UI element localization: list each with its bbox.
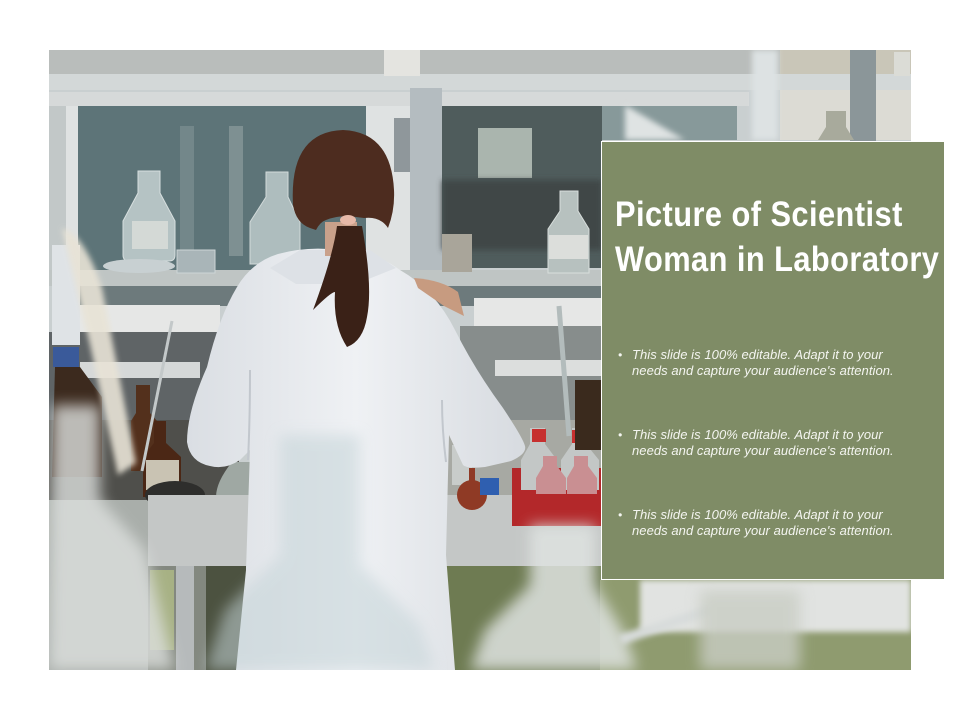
bullet text 2: This slide is 100% editable. Adapt it to your <box>632 427 883 442</box>
heading: Picture of Scientist <box>615 195 903 234</box>
bench and lower cabinet <box>148 495 911 670</box>
bullet text 2: needs and capture your audience's attention. <box>632 443 894 458</box>
red rack with bottles <box>452 306 601 526</box>
bullet text 3: needs and capture your audience's attention. <box>632 523 894 538</box>
bullet text 1: needs and capture your audience's attention. <box>632 363 894 378</box>
heading: Woman in Laboratory <box>615 240 939 279</box>
shelf glassware <box>103 126 589 273</box>
bullet text 3 <box>618 507 894 538</box>
bullet text 1 <box>618 347 894 378</box>
blurred foreground glassware <box>49 50 910 670</box>
bullet text 3: This slide is 100% editable. Adapt it to your <box>632 507 883 522</box>
heading <box>615 195 939 279</box>
bullet text 1: • <box>618 348 622 362</box>
photo: scientist woman in laboratory <box>49 50 911 670</box>
bottles on the left bench <box>52 245 250 517</box>
panel: description <box>601 141 945 580</box>
bullet text 3: • <box>618 508 622 522</box>
hair and ponytail <box>293 130 394 347</box>
woman in white lab coat <box>187 130 525 670</box>
bullet text 1: This slide is 100% editable. Adapt it to your <box>632 347 883 362</box>
lab background <box>49 50 911 670</box>
bullet text 2 <box>618 427 894 458</box>
bullet text 2: • <box>618 428 622 442</box>
